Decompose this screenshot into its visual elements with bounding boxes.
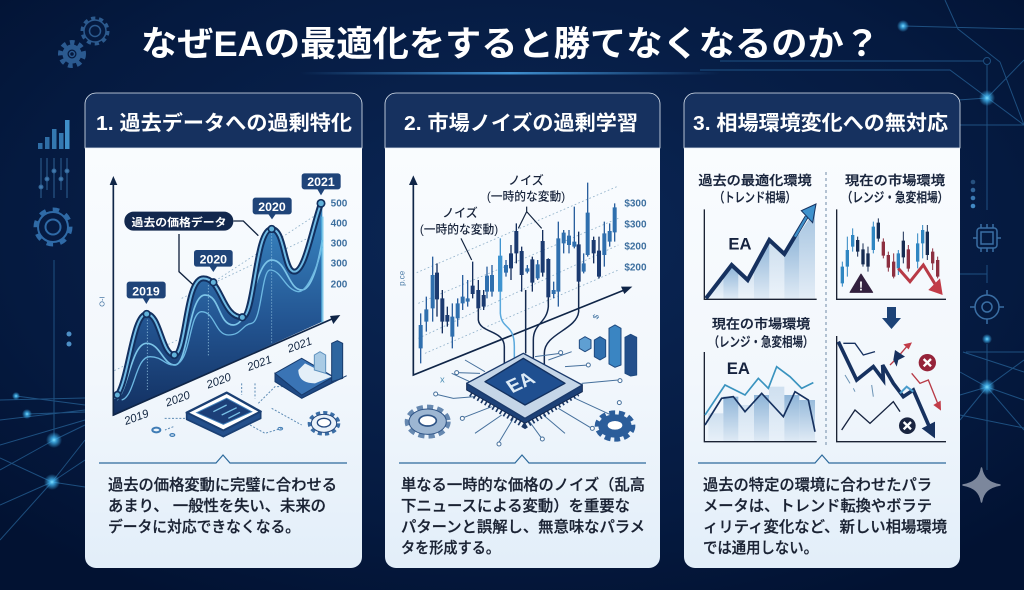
chart: noisy candlesticks: $300 <box>624 198 647 209</box>
panel description: 過去の価格変動に完璧に合わせる <box>108 477 337 494</box>
card background <box>85 93 362 568</box>
panel description: では通用しない。 <box>703 540 818 557</box>
panel description <box>401 476 645 557</box>
chart: current range market: 現在の市場環境 <box>845 172 945 188</box>
icon: bar chart decoration <box>38 120 70 149</box>
chart: past trend market: EA <box>728 234 752 253</box>
panel description: ィリティ変化など、新しい相場環境 <box>703 519 947 536</box>
chart: overfitted price curve: O-I <box>97 297 106 307</box>
noise labels: ノイズ <box>442 205 478 220</box>
panel description: メータは、トレンド転換やボラテ <box>703 497 932 515</box>
panel description: パターンと誤解し、無意味なパラメ <box>401 519 645 536</box>
icon: isometric block with bars <box>275 341 347 398</box>
chart: past trend market: 過去の最適化環境 <box>698 172 812 188</box>
icon: circuit chip decoration <box>973 224 1001 252</box>
chart: past trend market <box>698 172 817 299</box>
arrow: down <box>882 307 901 329</box>
noise labels <box>420 172 565 236</box>
chart: overfitted price curve: 2019 <box>132 284 160 298</box>
chart: overfitted price curve: 300 <box>331 259 348 270</box>
panel description: 下ニュースによる変動）を重要な <box>401 498 630 515</box>
icon: target node decoration <box>970 290 1004 324</box>
chart: EA failing <box>837 336 946 442</box>
divider with pointer <box>698 455 946 463</box>
decoration: left glowing nodes <box>12 332 72 490</box>
chart: overfitted price curve: 2021 <box>285 336 314 356</box>
panel heading: 1. 過去データへの過剰特化 <box>96 111 353 135</box>
panel: 過去データへの過剰特化 <box>85 93 362 568</box>
card background <box>385 93 660 568</box>
chart: overfitted price curve: 200 <box>331 279 348 290</box>
chart: overfitted price curve: 2019 <box>122 408 151 428</box>
noise labels: (一時的な変動) <box>487 189 565 204</box>
icon: sparkle star <box>963 468 1000 502</box>
panel description: データに対応できなくなる。 <box>108 518 300 536</box>
decoration: right network lines <box>700 0 1024 470</box>
icon: sliders decoration <box>39 158 69 198</box>
chart: noisy candlesticks: $200 <box>624 263 647 274</box>
chart: noisy candlesticks: x <box>440 375 445 385</box>
chart: overfitted price curve: 2021 <box>245 354 274 374</box>
icon: isometric tablet <box>152 383 302 437</box>
icon: left gear <box>408 408 448 436</box>
panel description: 過去の特定の環境に合わせたパラ <box>703 477 932 494</box>
divider with pointer <box>99 455 347 463</box>
icon: EA processor chip: EA <box>502 368 539 397</box>
chart: overfitted price curve: 過去の価格データ <box>131 215 226 229</box>
chart: current market with EA: EA <box>727 359 750 378</box>
panel heading <box>85 93 362 148</box>
panel: 相場環境変化への無対応 <box>684 93 960 568</box>
chart: overfitted price curve: 300 <box>331 238 348 249</box>
panel description <box>108 477 337 536</box>
icon: EA processor chip <box>434 351 622 446</box>
panel description <box>703 477 947 557</box>
icon: isometric bars <box>579 325 637 376</box>
panel heading: 3. 相場環境変化への無対応 <box>693 112 949 135</box>
chart: overfitted price curve: 2020 <box>163 389 193 410</box>
chart: noisy candlesticks <box>397 175 647 385</box>
card background <box>684 93 960 568</box>
chart: overfitted price curve <box>97 173 348 428</box>
panel heading <box>684 93 960 148</box>
dashed separator <box>825 172 827 447</box>
noise labels: (一時的な変動) <box>420 221 498 236</box>
chart: current market with EA: 現在の市場環境 <box>712 315 810 331</box>
decoration: left network lines <box>0 260 85 540</box>
panel description: タを形成する。 <box>401 540 500 557</box>
chart: overfitted price curve: 2020 <box>204 371 234 392</box>
chart: overfitted price curve: 2021 <box>307 175 335 189</box>
chart: noisy candlesticks: $ <box>591 313 601 320</box>
chart: current range market: （レンジ・急変相場） <box>842 189 948 205</box>
chart: overfitted price curve: 2020 <box>200 252 227 266</box>
noise labels: ノイズ <box>508 172 544 187</box>
title: なぜEAの最適化をすると勝てなくなるのか？ <box>141 25 880 64</box>
chart: noisy candlesticks: $200 <box>624 241 647 252</box>
icon: top-left filled gear <box>62 44 82 64</box>
icon: right gear <box>598 413 632 439</box>
icon: large left gear <box>37 211 69 243</box>
chart: current market with EA <box>704 315 817 442</box>
chart: past trend market: （トレンド相場） <box>714 189 796 205</box>
panel description: 単なる一時的な価格のノイズ（乱高 <box>401 476 645 494</box>
panel heading <box>385 93 660 148</box>
icon: isometric gear <box>310 413 338 433</box>
chart: noisy candlesticks: $300 <box>624 220 647 231</box>
panel: 市場ノイズの過剰学習 <box>385 93 660 568</box>
chart: overfitted price curve: 2020 <box>258 200 286 214</box>
divider with pointer <box>399 455 646 463</box>
chart: overfitted price curve: 400 <box>331 218 348 229</box>
icon: top-left outline gear <box>83 19 107 43</box>
chart: noisy candlesticks: p.ce <box>397 270 406 286</box>
chart: current range market: ! <box>859 280 863 294</box>
title underline <box>300 72 720 74</box>
decoration: right glowing nodes <box>897 20 995 395</box>
chart: overfitted price curve: 500 <box>331 198 348 209</box>
chart: current range market <box>837 172 948 299</box>
chart: current market with EA: （レンジ・急変相場） <box>708 333 813 349</box>
panel description: あまり、 一般性を失い、未来の <box>108 498 326 515</box>
panel heading: 2. 市場ノイズの過剰学習 <box>404 111 638 135</box>
